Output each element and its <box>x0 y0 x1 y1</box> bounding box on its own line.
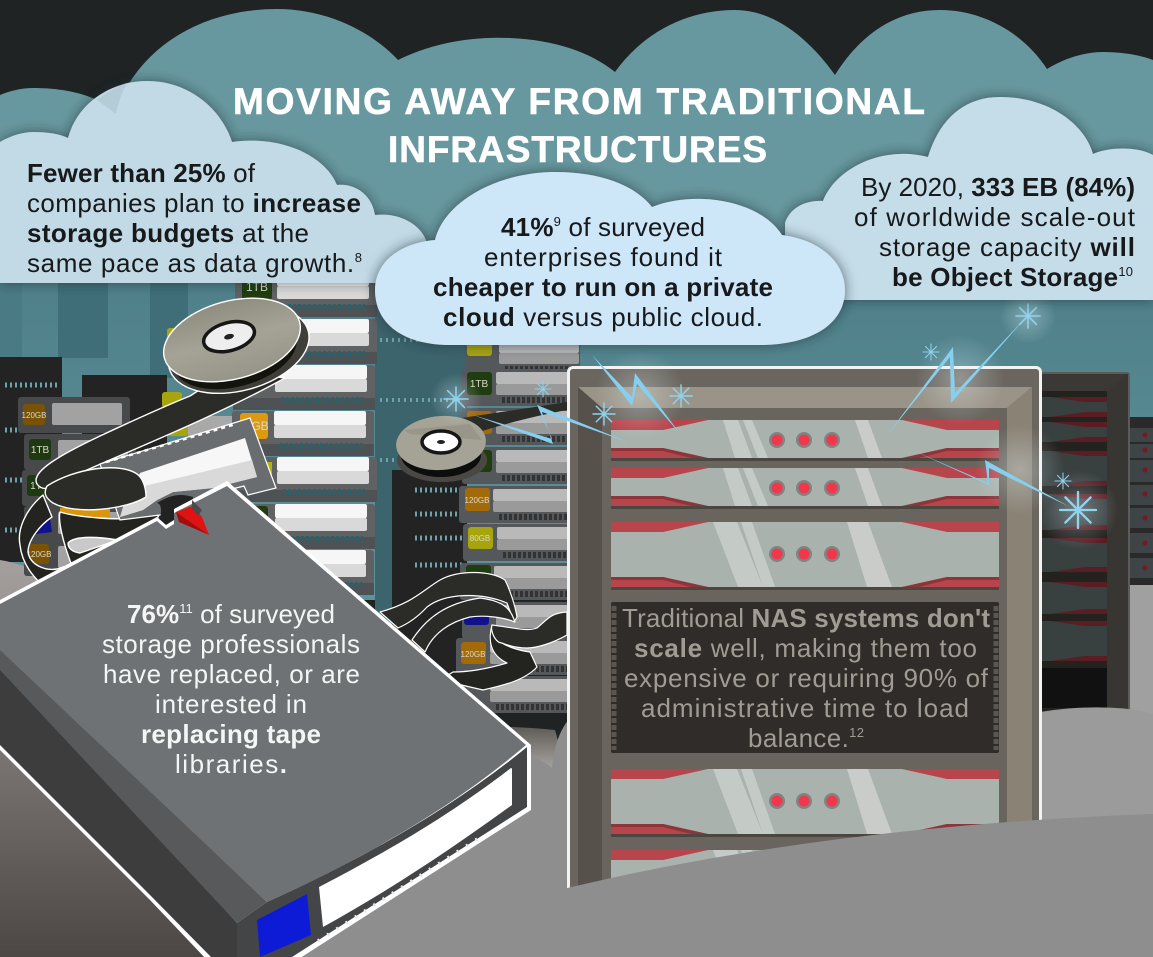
server stack center-left <box>232 272 377 595</box>
cartridge top face <box>0 486 526 902</box>
right cloud text: be Object Storage <box>892 262 1118 292</box>
cartridge text: storage professionals <box>102 629 360 659</box>
server stack center: 1TB <box>470 379 488 390</box>
tape ribbon loop <box>45 468 146 510</box>
center cloud text: cheaper to run on a private <box>433 272 773 302</box>
left hill <box>0 560 300 957</box>
NAS text: scale well, making them too <box>634 633 977 663</box>
center cloud text <box>433 212 773 332</box>
center cloud text: enterprises found it <box>484 242 723 272</box>
fold highlight <box>97 83 127 114</box>
mid hill between cartridge and rack <box>380 726 558 770</box>
cloud: right <box>785 97 1153 300</box>
server stack center-left: 1TB <box>246 280 268 294</box>
NAS text: balance. <box>748 723 849 753</box>
cartridge leader strip <box>100 418 276 530</box>
server stack center: 120GB <box>465 496 489 505</box>
center cloud text: 9 <box>554 214 561 229</box>
small server stack far left <box>18 328 232 576</box>
foreground hill <box>300 814 1153 957</box>
lightning bolt 4 <box>912 450 1070 507</box>
grey ground behind rack <box>300 700 1153 957</box>
left cloud text: Fewer than 25% of <box>27 158 256 188</box>
distant dark server columns <box>0 283 467 720</box>
server stack center: 80GB <box>470 534 490 543</box>
title: INFRASTRUCTURES <box>388 129 767 170</box>
right cloud text: 10 <box>1118 264 1133 279</box>
NAS text: expensive or requiring 90% of <box>624 663 989 693</box>
far right server rack <box>1125 417 1153 715</box>
left cloud text <box>27 158 362 278</box>
small tape reel <box>394 413 488 482</box>
left cloud text: companies plan to increase <box>27 188 361 218</box>
cloud: center <box>375 172 845 345</box>
NAS text <box>622 603 990 753</box>
small server stack far left: 120GB <box>22 411 46 420</box>
red write-protect tab <box>176 500 209 535</box>
title: MOVING AWAY FROM TRADITIONAL <box>233 81 925 122</box>
right cloud text: storage capacity will <box>879 232 1135 262</box>
spark stars <box>444 304 1096 528</box>
center cloud text: 41% <box>501 212 553 242</box>
cartridge text: replacing tape <box>141 719 321 749</box>
right cloud text <box>854 172 1136 292</box>
server stack center-left: GB <box>251 419 269 433</box>
cartridge text: of surveyed <box>193 599 335 629</box>
cloud: left <box>0 81 440 283</box>
cartridge body outline <box>0 481 531 957</box>
rear server rack <box>1036 372 1130 717</box>
NAS text: administrative time to load <box>641 693 969 723</box>
right cloud text: of worldwide scale-out <box>854 202 1136 232</box>
cartridge edge band <box>0 648 267 923</box>
NAS text: Traditional NAS systems don't <box>622 603 990 633</box>
cartridge side <box>0 660 237 957</box>
lightning bolt 3 <box>885 315 1028 438</box>
tape ribbon big reel to cartridge <box>19 370 285 585</box>
notches <box>318 836 482 941</box>
cartridge text: interested in <box>155 689 307 719</box>
small server stack far left: 120GB <box>27 550 51 559</box>
tape ribbon behind small reel <box>443 402 567 435</box>
center cloud text: cloud versus public cloud. <box>443 302 763 332</box>
title <box>233 81 925 170</box>
cartridge front <box>237 747 527 957</box>
teal backdrop <box>0 280 1153 600</box>
left cloud text: 8 <box>355 250 362 265</box>
blue tab <box>257 894 311 957</box>
lightning bolt 1 <box>592 355 681 435</box>
cartridge text: 11 <box>179 601 193 616</box>
right cloud text: By 2020, 333 EB (84%) <box>861 172 1135 202</box>
server stack center: 120GB <box>461 650 485 659</box>
rack blades <box>611 420 999 918</box>
small server stack far left: 1TB <box>31 445 49 456</box>
lightning bolt 2 <box>473 405 630 444</box>
sparks and lightning <box>430 288 1118 550</box>
NAS text: 12 <box>849 725 864 740</box>
tape ribbons lower <box>380 572 567 690</box>
server stack center <box>456 338 580 713</box>
white label <box>319 768 512 927</box>
tape cartridge <box>0 481 531 957</box>
hill behind rack on the right <box>1040 707 1153 830</box>
cartridge text: 76% <box>127 599 179 629</box>
background cloud <box>0 9 1153 283</box>
cartridge text <box>102 599 360 779</box>
small server stack far left: 1T <box>30 481 42 492</box>
center cloud text: of surveyed <box>561 212 705 242</box>
NAS panel <box>611 602 999 753</box>
big tape reel <box>154 283 319 408</box>
cartridge text: have replaced, or are <box>103 659 360 689</box>
left cloud text: same pace as data growth. <box>27 248 354 278</box>
main server rack <box>567 366 1042 930</box>
left cloud text: storage budgets at the <box>27 218 309 248</box>
cartridge text: libraries. <box>175 749 287 779</box>
